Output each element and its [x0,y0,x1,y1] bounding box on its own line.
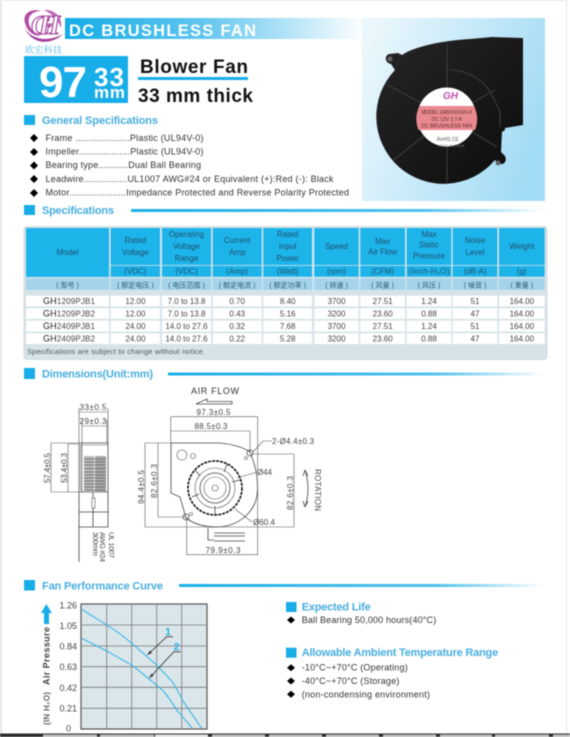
table header cells: (Watt) [277,267,299,276]
front view drawing: 82.6±0.3 [286,475,295,510]
front view drawing [137,386,322,555]
table chinese label row: ( 噪音 ) [464,280,486,290]
table data cells: 51 [471,297,480,306]
size badge [24,56,128,107]
table data cells: 7.0 to 13.8 [168,297,206,306]
front view drawing: 79.9±0.3 [206,546,241,555]
table data cells: 12.00 [125,297,146,306]
table data cells: 27.51 [373,322,393,331]
table header cells [26,228,545,277]
front view drawing: 97.3±0.5 [196,408,231,417]
heading: Specifications [24,205,545,217]
table header cells: Speed [325,242,348,251]
side view drawing: 29±0.3 [80,417,107,426]
y axis title and arrow: Air Pressure [42,627,52,685]
side view drawing: 53.4±0.3 [60,452,69,483]
text: expected life: Ball Bearing 50,000 hours(40°C) [302,615,436,625]
table data cells: 5.28 [280,334,296,344]
table data cells: 1.24 [421,297,437,306]
banner [65,18,365,40]
side view drawing: 57.4±0.5 [43,452,52,483]
heading: Specifications: Specifications [42,205,114,217]
product title [138,57,253,107]
heading: Dimensions: Dimensions(Unit:mm) [42,368,153,380]
table header cells: (Inch-H₂O) [408,267,450,276]
curve label 2: 2 [174,642,180,653]
table data cells: 164.00 [510,310,535,318]
table data cells [26,296,545,344]
list: temperature range: (non-condensing environment) [302,689,430,699]
list: general specifications: Bearing type...........Dual Ball Bearing [46,160,201,170]
banner: DC BRUSHLESS FAN [69,22,256,40]
y axis values [59,600,77,734]
table data cells: 3200 [328,310,346,318]
table header cells: Operating [169,230,204,239]
side view drawing [43,403,116,562]
table data cells: 47 [471,310,480,318]
list: general specifications [30,133,349,198]
curve label 2 [149,642,181,678]
heading: Expected Life: Expected Life [302,602,371,614]
table data cells: 23.60 [373,310,393,318]
table header cells: Voltage [173,242,200,251]
air flow arrow [191,386,240,404]
y axis values: 1.05 [59,621,77,631]
table data cells: 7.68 [280,322,296,331]
list: general specifications: Impeller...................Plastic (UL94V-0) [46,147,204,157]
table chinese label row: ( 型号 ) [56,280,79,290]
fan photo: MODEL GMXXXXXH-X [421,110,473,116]
table chinese label row: ( 额定电流 ) [219,280,255,290]
list: temperature range: -10°C~+70°C (Operating) [302,662,408,672]
table data cells: 0.88 [421,310,437,318]
table data cells: GH1209PJB2 [43,308,96,318]
table header cells: Rated [277,230,298,239]
table header cells: Model [57,248,79,257]
table header cells: Static [419,241,439,250]
y axis title and arrow: (IN H₂O) [42,692,52,725]
product title: Blower Fan [140,57,248,78]
table header cells: Rated [125,236,146,245]
table data cells: 164.00 [510,322,535,331]
heading: Dimensions [24,368,545,380]
table data cells: 27.51 [373,297,393,306]
list: temperature range: -40°C~+70°C (Storage) [302,676,399,686]
y axis values: 1.26 [59,600,77,610]
list: general specifications: Frame ....................Plastic (UL94V-0) [46,133,204,143]
table chinese label row [26,278,545,290]
logo: GH [31,10,61,40]
size badge: 97 [39,58,87,107]
table data cells: 164.00 [510,334,535,344]
y axis title and arrow [41,604,52,725]
curve 1 [82,609,202,728]
table data cells: GH2409PJB2 [43,334,96,344]
y axis values: 0 [66,724,71,734]
table header cells: (Amp) [226,267,248,276]
table data cells: 0.43 [229,310,246,318]
table chinese label row: ( 转速 ) [325,280,348,290]
table header cells: (VDC) [175,267,198,276]
table header cells: Range [175,254,199,263]
y axis values: 0.21 [59,704,77,714]
table header cells: Max [421,230,437,239]
table header cells: Amp [229,248,246,257]
table header cells: Noise [465,236,486,245]
table data cells: 164.00 [510,297,535,306]
curve label 1: 1 [165,627,171,638]
table chinese label row: ( 风量 ) [371,282,394,290]
table data cells: 3700 [328,322,346,331]
front view drawing: 88.5±0.3 [194,422,228,431]
rotation arrow: ROTATION [313,469,322,511]
size badge: mm [94,83,125,102]
fan photo: GH [443,91,459,102]
fan photo: RoHS CE [437,137,459,143]
table data cells: 0.22 [229,334,246,344]
curve 2 [82,638,192,728]
heading: Fan Performance Curve: Fan Performance Curve [42,580,163,592]
y axis values: 0.63 [59,662,77,672]
y axis values: 0.42 [59,683,77,693]
fan photo: DC BRUSHLESS FAN [421,124,473,130]
table data cells: 5.16 [280,310,296,318]
fan photo: DC 12V 2.7 A [432,117,463,123]
table chinese label row: ( 额定功率 ) [269,280,306,290]
table header cells: Air Flow [368,248,397,257]
table header cells: (CFM) [371,267,394,276]
list: general specifications: Motor.....................Impedance Protected and Reverse Polarity Protected [46,188,349,198]
table data cells: GH2409PJB1 [43,321,96,331]
table header cells: Max [375,237,390,246]
table data cells: 8.40 [280,297,296,306]
front view drawing: Ø44 [257,468,273,477]
side view drawing: 300mm [91,532,100,556]
table data cells: 0.32 [229,322,246,331]
table chinese label row: ( 额定电压 ) [117,280,154,290]
table header cells: Pressure [413,251,446,260]
front view drawing: 2-Ø4.4±0.3 [272,437,315,446]
table data cells: 24.00 [125,322,146,331]
side view drawing: UL 1007 [107,532,116,558]
table data cells: 14.0 to 27.6 [165,334,208,344]
table header cells: (dB-A) [463,267,487,276]
table header cells: (VDC) [124,267,147,276]
list: general specifications: Leadwire................UL1007 AWG#24 or Equivalent (+):Red (-): Black [46,174,334,184]
table header cells: (g) [517,267,527,276]
table footnote: Specifications are subject to change without notice. [27,347,205,356]
table header cells: Weight [509,242,535,251]
heading: Fan Performance Curve [24,580,545,592]
size badge: 33 [94,62,124,92]
table chinese label row: ( 风压 ) [418,282,440,290]
curve label 1 [147,627,173,655]
table data cells: 3700 [328,297,346,306]
table header cells: Current [224,236,251,245]
table chinese label row: ( 电压范围 ) [168,280,205,290]
front view drawing: Ø60.4 [253,518,276,527]
table chinese label row: ( 重量 ) [511,282,533,290]
table data cells: 1.24 [421,322,437,331]
front view drawing: 82.6±0.3 [150,463,159,498]
fan performance chart [41,600,207,734]
table data cells: 12.00 [125,310,146,318]
rotation arrow [303,469,322,511]
table data cells: 7.0 to 13.8 [168,310,206,318]
table header cells: Power [276,254,299,263]
product title: 33 mm thick [138,86,253,107]
y axis values: 0.84 [59,642,77,652]
specification table [24,226,547,360]
logo [24,10,63,56]
table data cells: 47 [471,334,480,344]
table header cells: Level [465,248,485,257]
table data cells: 14.0 to 27.6 [165,322,208,331]
table header cells: Input [279,242,297,251]
front view drawing: 94.4±0.5 [137,469,146,504]
table data cells: 24.00 [125,334,146,344]
heading: Allowable Ambient Temperature Range: Allowable Ambient Temperature Range [302,647,498,659]
side view drawing: AWG #24 [98,532,107,562]
table data cells: 51 [471,322,480,331]
table data cells: 3200 [328,334,346,344]
list: temperature range [287,662,430,699]
air flow arrow: AIR FLOW [191,386,240,396]
logo: 欧宏科技 [25,43,62,56]
side view drawing: 33±0.5 [80,403,107,412]
fan photo [362,18,545,201]
table data cells: GH1209PJB1 [43,296,96,306]
table header cells: (rpm) [327,267,346,276]
table data cells: 23.60 [373,334,393,344]
table header cells: Voltage [122,248,149,257]
plot area [81,604,207,729]
fan photo: MADE IN CHINA [438,144,465,148]
bottom tab strip [0,734,570,737]
table data cells: 0.70 [229,297,246,306]
heading: General Specifications: General Specifications [42,115,158,127]
table data cells: 0.88 [421,334,437,344]
